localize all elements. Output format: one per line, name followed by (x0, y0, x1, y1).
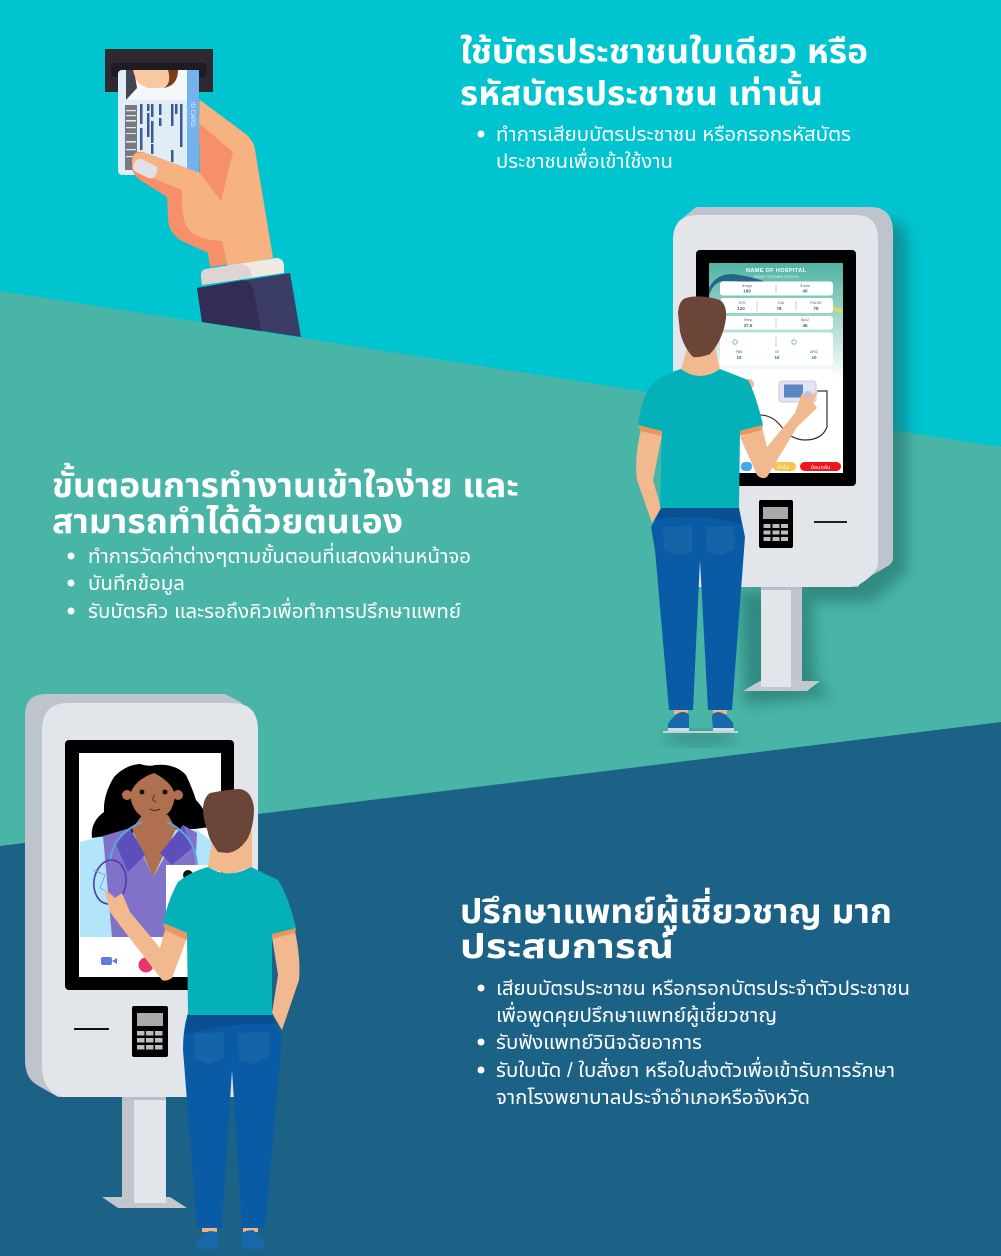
bullet list: section 3 (478, 978, 910, 1109)
bullet list: section 3: จากโรงพยาบาลประจำอำเภอหรือจังหวัด (496, 1087, 810, 1109)
neck (681, 345, 720, 378)
bullet list: section 1: ทำการเสียบบัตรประชาชน หรือกรอกรหัสบัตร (496, 124, 851, 146)
screen content: NAME OF HOSPITAL (746, 268, 807, 274)
screen content: SYS (738, 301, 746, 305)
screen content: ถัดไป (777, 464, 789, 471)
kiosk stand (743, 587, 820, 691)
kiosk stand (102, 1097, 187, 1208)
kiosk: video consultation station (25, 694, 258, 1208)
person: patient using kiosk (636, 296, 818, 744)
hair (203, 789, 254, 853)
heading: section 1: รหัสบัตรประชาชน เท่านั้น (460, 70, 823, 113)
background: dark blue bottom band (0, 722, 1001, 1256)
screen content: 10 (811, 355, 817, 360)
screen content: 120 (737, 306, 745, 311)
doctor collars (115, 825, 192, 872)
fingers behind shoulder (744, 379, 754, 389)
left arm in pocket (636, 429, 662, 523)
shoes (195, 1226, 265, 1249)
shirt (638, 369, 763, 508)
screen content: Spo2 (801, 318, 809, 322)
hand front (132, 100, 273, 267)
kiosk shadow (740, 222, 907, 705)
screen content: Temp (744, 318, 752, 322)
thumbnail (131, 157, 159, 180)
stethoscope (91, 822, 197, 906)
screen content: SMART TELEMED STATION (753, 275, 799, 279)
bullet list: section 1: ประชาชนเพื่อเข้าใช้งาน (496, 147, 673, 173)
pants (183, 1013, 282, 1228)
doctor shirt (103, 825, 197, 937)
screen content: DIA (778, 301, 785, 305)
reaching arm (104, 889, 187, 981)
shoes (668, 709, 734, 731)
kiosk body (25, 694, 258, 1097)
screen content: 78 (776, 306, 782, 311)
screen content: ย้อนกลับ (811, 464, 830, 471)
right arm (740, 391, 818, 478)
screen content: 45 (802, 288, 808, 294)
screen: doctor video (79, 753, 221, 977)
doctor coat (80, 828, 218, 937)
screen bezel (696, 250, 856, 486)
bullet list: section 3: เสียบบัตรประชาชน หรือกรอกบัตรประจำตัวประชาชน (496, 978, 910, 1000)
bullet list: section 2 (68, 542, 471, 623)
screen content (709, 263, 843, 473)
heading: section 3 (460, 887, 892, 966)
doctor neck (132, 815, 176, 877)
screen content: BI (775, 350, 779, 354)
heading: section 2 (52, 462, 519, 541)
hand back (132, 100, 273, 267)
ground shadow (662, 732, 738, 744)
heading: section 2: สามารถทำได้ด้วยตนเอง (52, 503, 403, 541)
screen content: 10 (774, 355, 780, 360)
bullet list: section 2: ทำการวัดค่าต่างๆตามขั้นตอนที่แสดงผ่านหน้าจอ (88, 542, 471, 568)
hand shadow fold (199, 123, 233, 201)
shirt cuff (201, 258, 284, 285)
bullet list: section 2: บันทึกข้อมูล (88, 572, 185, 596)
doctor face (122, 773, 183, 820)
bullet list: section 2: รับบัตรคิว และรอถึงคิวเพื่อทำการปรึกษาแพทย์ (88, 597, 461, 623)
right arm in pocket (272, 931, 300, 1030)
card label: ID CARD (189, 102, 195, 127)
background: teal middle band (0, 291, 1001, 1256)
screen content: ส่วนสูง (742, 284, 752, 288)
screen content: 10 (736, 355, 742, 360)
heading: section 2: ขั้นตอนการทำงานเข้าใจง่าย และ (52, 462, 519, 505)
ground line (663, 731, 738, 733)
screen bezel (65, 740, 234, 990)
bullet list: section 3: รับฟังแพทย์วินิจฉัยอาการ (496, 1032, 702, 1054)
card slot line (814, 521, 847, 523)
heading: section 3: ประสบการณ์ (460, 928, 674, 966)
call buttons (101, 957, 154, 972)
card slot (105, 49, 213, 92)
ID card (118, 70, 199, 175)
card keypad (759, 500, 793, 548)
bullet list: section 3: เพื่อพูดคุยปรึกษาแพทย์ผู้เชี่ยวชาญ (496, 1001, 777, 1028)
screen content: 160 (743, 288, 751, 294)
person: patient talking to doctor (104, 789, 300, 1249)
heading: section 3: ปรึกษาแพทย์ผู้เชี่ยวชาญ มาก (460, 887, 892, 932)
heading: section 1: ใช้บัตรประชาชนใบเดียว หรือ (460, 33, 868, 71)
shirt (163, 867, 296, 1015)
kiosk body (673, 207, 893, 587)
screen content: PULSE (810, 301, 822, 305)
kiosk: vitals station (673, 207, 907, 705)
hair (678, 296, 726, 357)
card keypad (132, 1006, 168, 1057)
screen content: น้ำหนัก (800, 283, 810, 288)
bullet list: section 3: รับใบนัด / ใบสั่งยา หรือใบส่งตัวเพื่อเข้ารับการรักษา (496, 1056, 895, 1082)
doctor hair (92, 764, 210, 838)
screen content: 45 (802, 323, 808, 328)
picture in picture (166, 865, 208, 977)
screen content: 78 (813, 306, 819, 311)
screen content: 37.5 (744, 323, 753, 328)
jacket sleeve (197, 273, 301, 337)
bullet list: section 1 (478, 124, 851, 173)
neck (208, 830, 252, 875)
illustration: hand inserting ID card (105, 49, 301, 337)
screen content: FBS (736, 350, 743, 354)
card slot line (74, 1028, 109, 1030)
pants (651, 508, 745, 710)
screen content: URIC (810, 350, 819, 354)
heading: section 1 (460, 33, 868, 113)
